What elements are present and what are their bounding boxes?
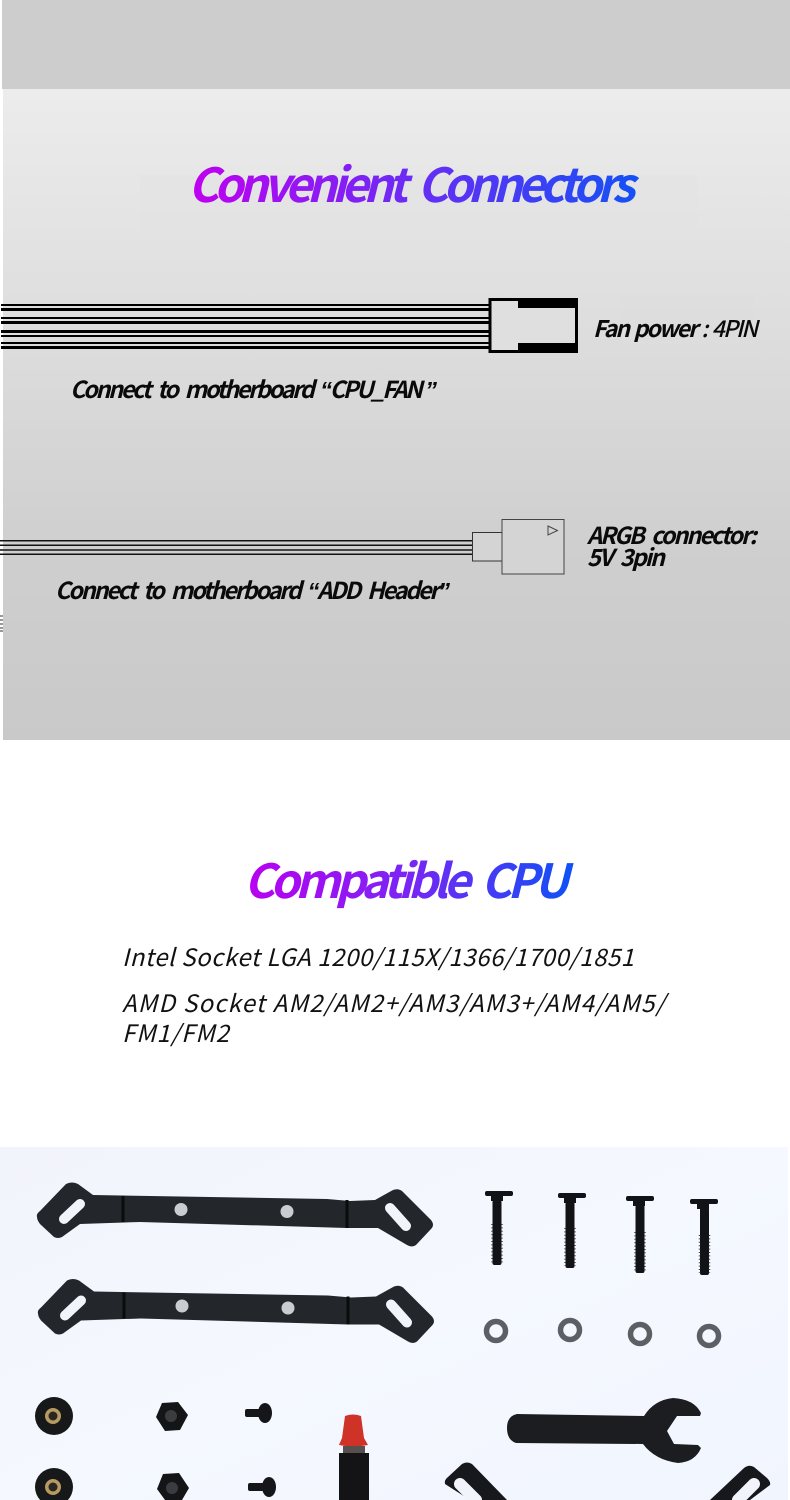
label: connect to CPU_FAN: Connect to motherboard “CPU_FAN ” [70,371,437,405]
rubber standoffs [35,1397,73,1500]
text block: compatible sockets [122,938,670,1049]
text block: compatible sockets: Intel Socket LGA 1200/115X/1366/1700/1851 [122,938,634,973]
panel: convenient connectors [0,89,790,740]
label: ARGB connector [586,517,758,573]
connector: fan power 4-pin cable [1,298,578,353]
panel: accessories photo [0,1147,788,1500]
mounting bracket 1 [37,1182,433,1246]
title: Compatible CPU: Compatible CPU [244,843,574,912]
title: Convenient Connectors: Convenient Connectors [188,147,640,216]
top grey band [2,0,790,89]
lower bracket right [710,1466,770,1500]
small screws [245,1403,276,1497]
label: ARGB connector: ARGB connector: [586,517,758,551]
text block: compatible sockets: FM1/FM2 [122,1014,232,1049]
mounting bracket 2 [38,1279,434,1343]
wrench [507,1398,701,1463]
label: ARGB connector: 5V 3pin [587,539,667,573]
lower bracket left [445,1462,507,1500]
screws row [485,1191,718,1275]
thermal paste tube [339,1414,369,1500]
hex nuts [156,1402,189,1500]
label: connect to ADD header: Connect to motherboard “ADD Header” [55,572,450,606]
text block: compatible sockets: AMD Socket AM2/AM2+/AM3/AM3+/AM4/AM5/ [122,984,670,1019]
washers row [486,1320,718,1346]
connector: ARGB 3-pin cable [0,520,564,574]
label: fan power 4pin: Fan power : 4PIN [593,310,760,344]
left edge ticks [0,616,3,631]
